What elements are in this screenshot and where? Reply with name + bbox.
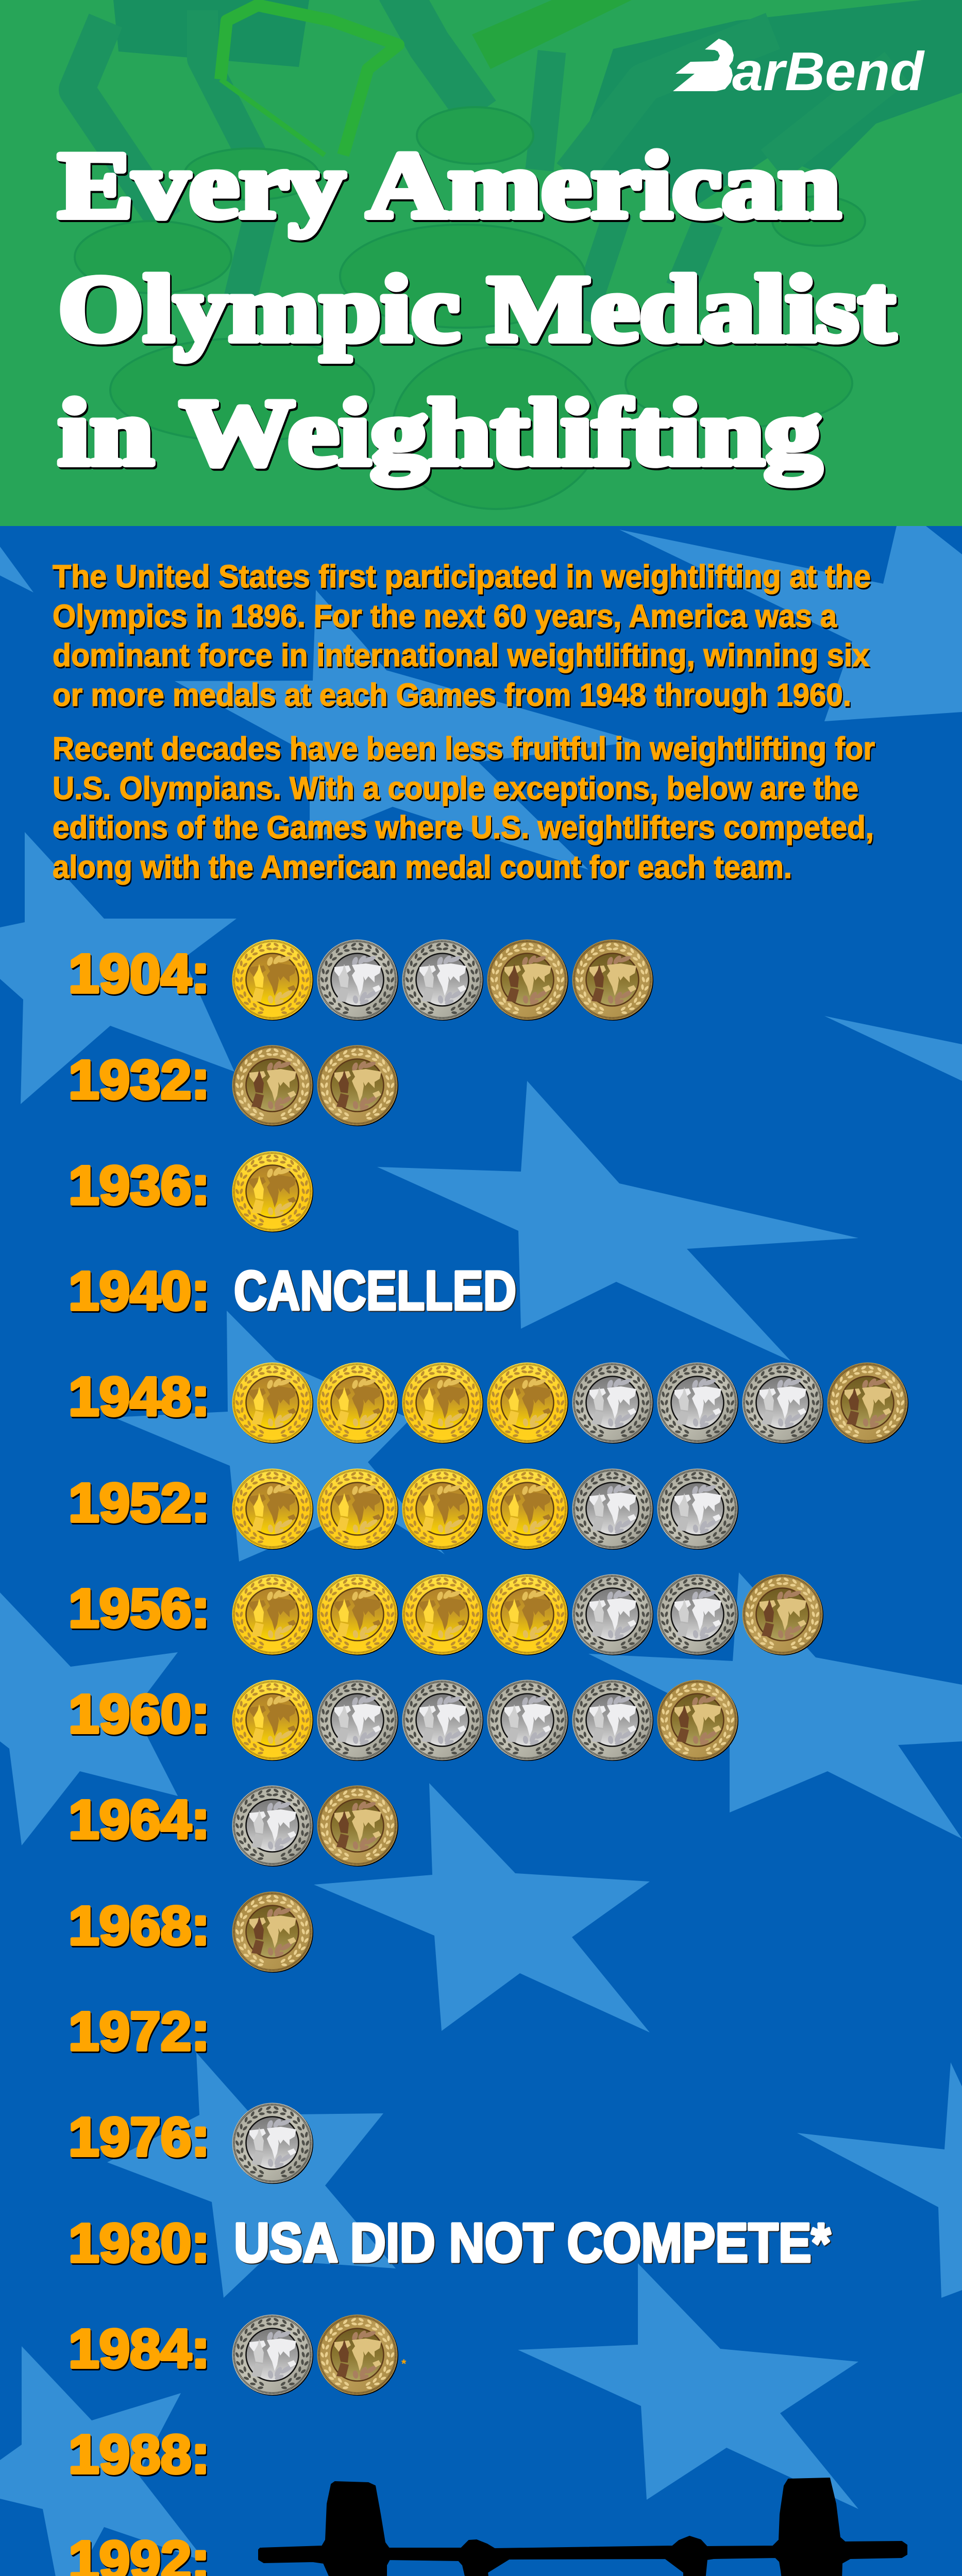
row 1904: 1904: (69, 943, 210, 1004)
row 1976 (69, 2103, 313, 2184)
row 1956: 1956: (69, 1578, 210, 1639)
row 1936 (69, 1151, 313, 1232)
row 1980: USA DID NOT COMPETE* (234, 2211, 831, 2274)
row 1956 (69, 1574, 823, 1655)
row 1968 (69, 1892, 313, 1973)
row 1936: 1936: (69, 1155, 210, 1216)
row 1940 (69, 1259, 516, 1321)
intro text: U.S. Olympians. With a couple exceptions, below are the (53, 771, 858, 806)
intro text: or more medals at each Games from 1948 through 1960. (53, 677, 851, 713)
row 1976: 1976: (69, 2107, 210, 2167)
intro text: Olympics in 1896. For the next 60 years, America was a (53, 599, 837, 634)
row 1904 (69, 940, 653, 1021)
row 1964: 1964: (69, 1789, 210, 1850)
row 1948: 1948: (69, 1366, 210, 1427)
row 1964 (69, 1786, 398, 1867)
intro text: along with the American medal count for each team. (53, 850, 792, 885)
row 1940: CANCELLED (234, 1259, 516, 1321)
title (58, 132, 895, 485)
title: in Weightlifting (58, 380, 821, 485)
intro text: The United States first participated in weightlifting at the (53, 559, 871, 595)
row 1960: 1960: (69, 1684, 210, 1744)
row 1932 (69, 1045, 398, 1126)
row 1968: 1968: (69, 1895, 210, 1956)
icon: weightlifter silhouette (259, 2478, 907, 2576)
row 1972: 1972: (69, 2001, 210, 2062)
title: Olympic Medalist (58, 256, 895, 361)
row 1952: 1952: (69, 1472, 210, 1533)
row 1940: 1940: (69, 1261, 210, 1321)
intro text: Recent decades have been less fruitful in weightlifting for (53, 731, 875, 767)
row 1948 (69, 1362, 908, 1444)
row 1988: 1988: (69, 2424, 210, 2485)
blue star background (0, 526, 962, 2576)
intro text: editions of the Games where U.S. weightlifters competed, (53, 810, 874, 845)
intro text (53, 559, 875, 885)
row 1980: 1980: (69, 2213, 210, 2274)
title: Every American (58, 132, 840, 238)
logo: BarBend top: arBend (732, 41, 925, 102)
row 1960 (69, 1680, 738, 1761)
row 1984 (69, 2314, 407, 2396)
row 1984: * (401, 2357, 407, 2371)
row 1984: 1984: (69, 2318, 210, 2379)
row 1932: 1932: (69, 1049, 210, 1110)
row 1952 (69, 1468, 738, 1550)
intro text: dominant force in international weightlifting, winning six (53, 638, 869, 673)
header panel with medal photo (0, 0, 962, 526)
